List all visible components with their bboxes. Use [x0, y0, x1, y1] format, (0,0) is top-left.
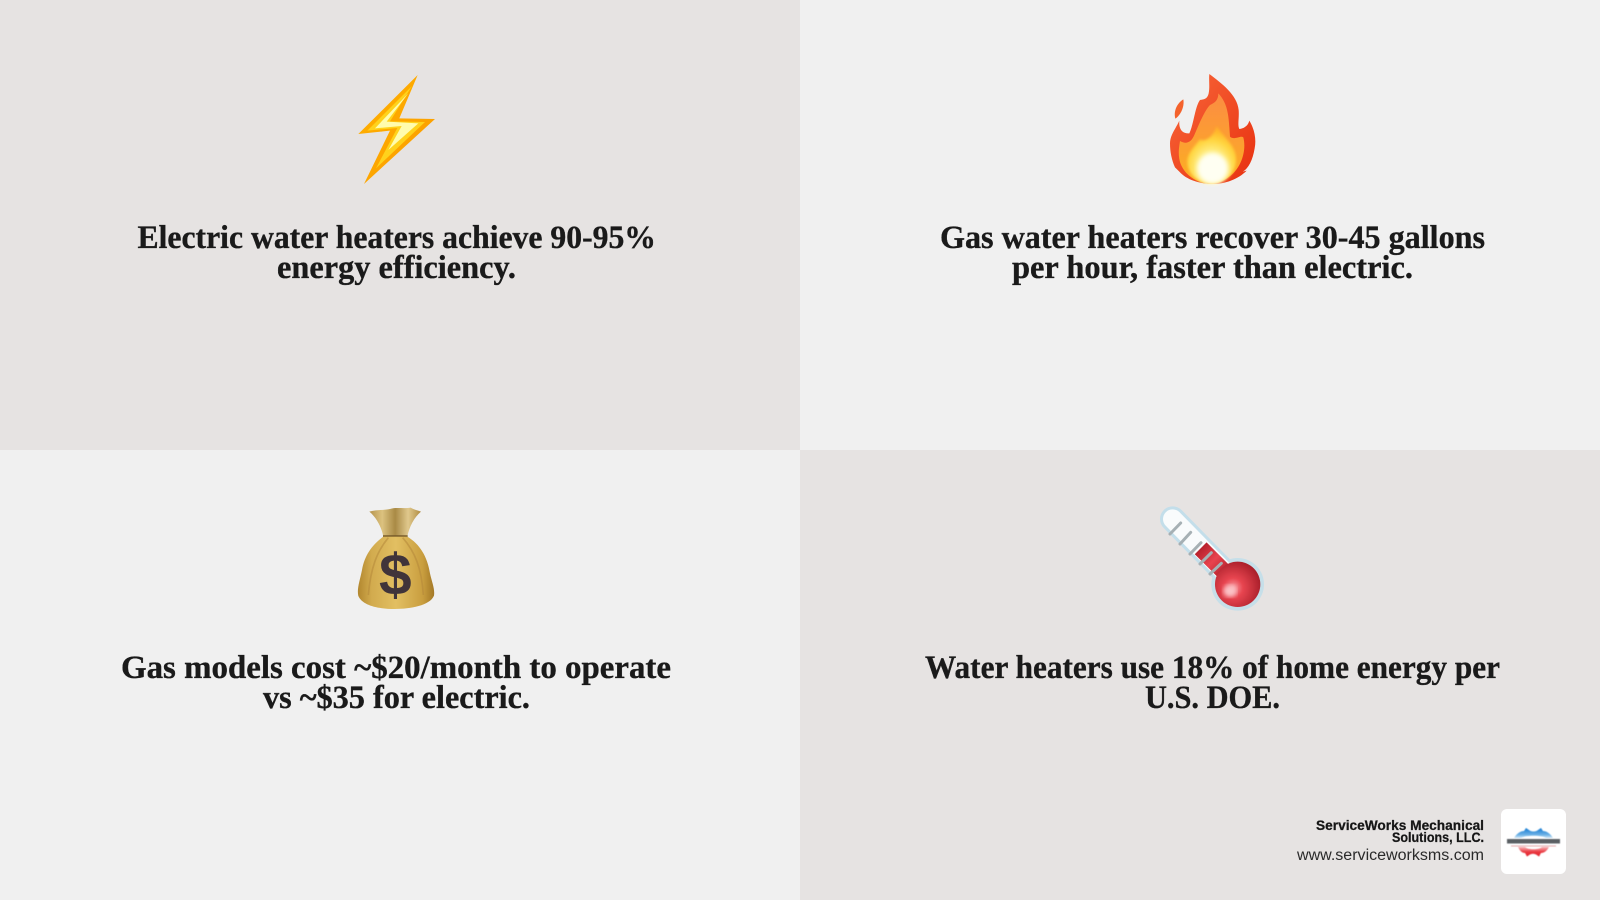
- text: electric fact: Electric water heaters achieve 90-95%: [138, 220, 656, 256]
- text: electric fact: [138, 220, 656, 286]
- text: gas fact: [940, 220, 1485, 286]
- icon: money bag: $: [379, 542, 412, 607]
- panel: gas recovery: [800, 0, 1600, 450]
- icon: lightning bolt: [358, 75, 435, 184]
- text: cost fact: Gas models cost ~$20/month to operate: [121, 650, 671, 686]
- text: energy fact: [925, 650, 1500, 716]
- icon: money bag: [358, 508, 434, 609]
- icon: company gear logo: [1507, 828, 1560, 856]
- text: energy fact: U.S. DOE.: [1145, 680, 1280, 716]
- company name and website: ServiceWorks Mechanical: [1316, 818, 1484, 833]
- company name and website: [1296, 818, 1484, 864]
- panel: electric efficiency: [0, 0, 800, 450]
- icon: flame: [1170, 74, 1255, 184]
- text: cost fact: vs ~$35 for electric.: [263, 680, 530, 716]
- text: electric fact: energy efficiency.: [277, 250, 516, 286]
- panel: operating cost: [0, 450, 800, 900]
- text: gas fact: per hour, faster than electric.: [1012, 250, 1413, 286]
- panel: home energy share: [800, 450, 1600, 900]
- icon: thermometer: [1170, 519, 1264, 611]
- text: energy fact: Water heaters use 18% of home energy per: [925, 650, 1500, 686]
- company name and website: www.serviceworksms.com: [1296, 847, 1484, 864]
- company name and website: Solutions, LLC.: [1392, 830, 1484, 845]
- text: gas fact: Gas water heaters recover 30-45 gallons: [940, 220, 1485, 256]
- text: cost fact: [121, 650, 671, 716]
- logo card: [1501, 809, 1566, 874]
